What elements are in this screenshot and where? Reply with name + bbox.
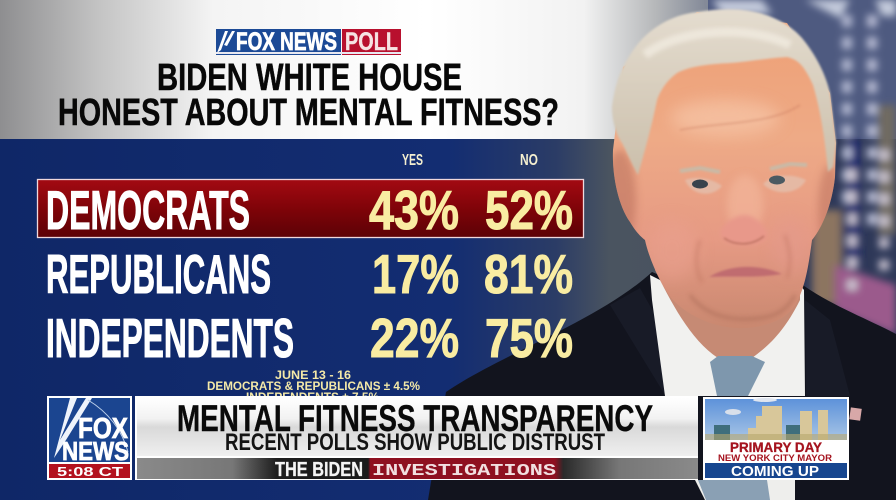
head and face	[613, 12, 836, 328]
suit jacket	[428, 272, 896, 500]
panel: upper title band	[0, 0, 712, 139]
nose	[720, 215, 767, 245]
face shading	[604, 100, 842, 319]
icon: Fox News channel logo with clock	[47, 396, 132, 480]
row: Democrats highlighted: DEMOCRATS	[46, 179, 250, 241]
column headings: yes and no: YES	[402, 152, 423, 169]
text block: poll dates and margin of error	[207, 370, 420, 404]
promo title: PRIMARY DAY	[730, 440, 822, 455]
column headings: yes and no: NO	[520, 152, 538, 169]
row: Democrats highlighted	[38, 179, 584, 241]
eyes	[692, 176, 785, 188]
row: Democrats highlighted: 43%	[369, 179, 459, 241]
ticker strip	[137, 458, 698, 479]
hair	[612, 9, 836, 175]
promo subtitle: NEW YORK CITY MAYOR	[718, 453, 832, 464]
neck	[655, 260, 800, 358]
promo coming up bar	[705, 463, 847, 478]
row: Republicans: REPUBLICANS	[46, 243, 271, 305]
icon: Fox News channel logo with clock: FOX	[78, 413, 129, 445]
panel: coming up promo	[703, 397, 849, 480]
ticker label: THE BIDEN	[275, 459, 363, 481]
text block: poll dates and margin of error: DEMOCRATS & REPUBLICANS ± 4.5%	[207, 381, 420, 393]
tie knot	[710, 356, 765, 396]
banner headline: MENTAL FITNESS TRANSPARENCY	[177, 398, 653, 439]
text block: poll dates and margin of error: INDEPENDENTS ± 7.5%	[246, 392, 379, 404]
heading: poll question	[58, 57, 559, 134]
shirt below banner	[695, 480, 795, 500]
row: Republicans: 81%	[484, 243, 573, 305]
eye sockets	[685, 176, 806, 194]
eyebrows	[680, 164, 807, 172]
banner subheadline: RECENT POLLS SHOW PUBLIC DISTRUST	[225, 429, 605, 456]
row: Independents: 75%	[485, 307, 573, 369]
shirt	[650, 275, 805, 396]
heading: poll question: BIDEN WHITE HOUSE	[157, 57, 462, 99]
hair highlight	[645, 32, 790, 55]
icon: Fox News channel logo with clock: 5:08 CT	[57, 464, 123, 479]
icon: Fox News channel logo with clock: NEWS	[62, 436, 129, 466]
mouth	[709, 267, 782, 277]
icon: Fox News Poll logo: POLL	[345, 28, 398, 56]
jacket lapel shading	[610, 288, 850, 396]
panel: blurred flag background	[708, 0, 896, 339]
heading: poll question: HONEST ABOUT MENTAL FITNESS?	[58, 92, 559, 134]
panel: lower navy background	[0, 139, 896, 500]
icon: Fox News Poll logo: FOX NEWS	[236, 28, 337, 56]
text block: poll dates and margin of error: JUNE 13 - 16	[275, 370, 351, 382]
column headings: yes and no	[402, 152, 538, 169]
lapel pin	[849, 407, 862, 421]
promo skyline photo	[705, 398, 847, 440]
row: Democrats highlighted: 52%	[485, 179, 573, 241]
tie blade	[698, 480, 770, 500]
panel: lower-third banner	[135, 396, 698, 481]
panel: coming up promo: COMING UP	[731, 463, 819, 480]
row: Independents: INDEPENDENTS	[46, 307, 294, 369]
portrait: man in suit	[428, 9, 896, 500]
ticker label: investigations: INVESTIGATIONS	[372, 462, 556, 481]
row: Independents: 22%	[370, 307, 459, 369]
row: Republicans: 17%	[372, 243, 459, 305]
